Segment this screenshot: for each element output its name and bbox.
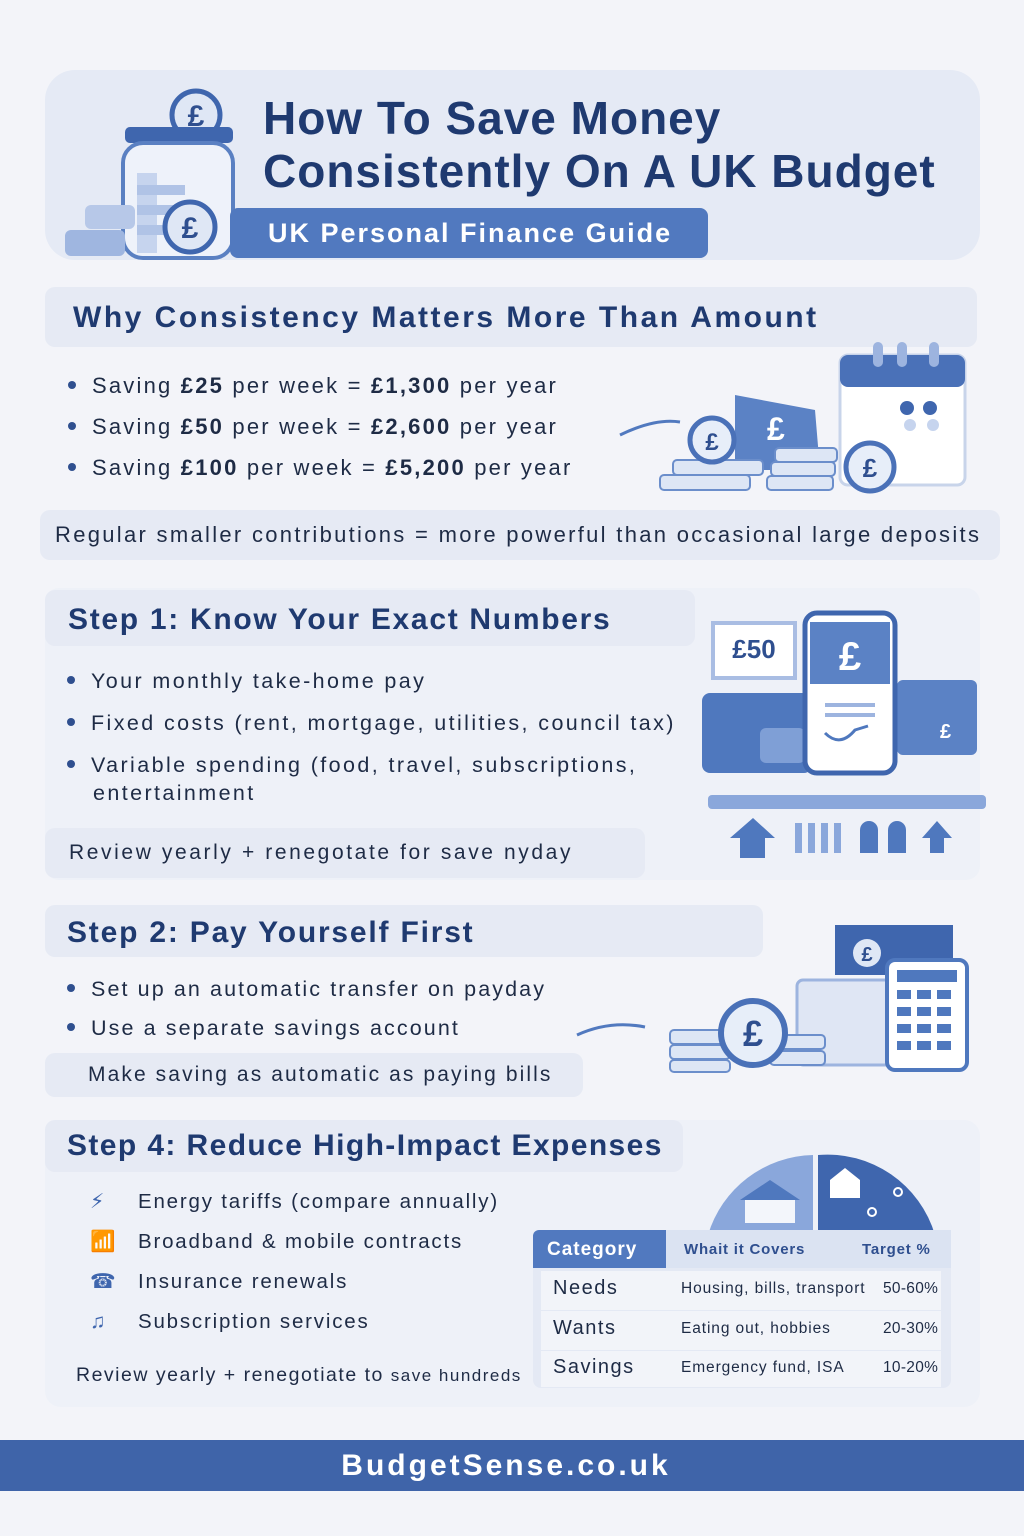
callout [45, 1053, 583, 1097]
bullets: Set up an automatic transfer on payday [91, 977, 546, 1001]
bullets: Saving £100 per week = £5,200 per year [92, 455, 573, 480]
bullets: Variable spending (food, travel, subscriptions, [91, 753, 637, 777]
subtitle banner: UK Personal Finance Guide [268, 218, 672, 248]
footer: BudgetSense.co.uk [341, 1449, 671, 1482]
table: budget split: Housing, bills, transport [681, 1280, 865, 1297]
heading [45, 287, 977, 347]
icon: coins laptop calculator: £ [861, 944, 873, 966]
bullets: Fixed costs (rent, mortgage, utilities, council tax) [91, 711, 676, 735]
heading: Step 2: Pay Yourself First [67, 916, 474, 949]
icon: wallet phone card: £ [839, 635, 861, 679]
icon: half pie chart [710, 1154, 934, 1230]
bullets [67, 669, 676, 805]
bullets: Saving £25 per week = £1,300 per year [92, 373, 558, 398]
bullets [67, 977, 546, 1040]
callout: Review yearly + renegotate for save nyday [69, 841, 573, 864]
icon: wallet phone card: £ [940, 721, 951, 743]
icon: calendar and coins [619, 342, 966, 494]
title: How To Save Money [263, 92, 721, 144]
icon: calendar and coins: £ [863, 453, 878, 483]
expense list: Energy tariffs (compare annually) [138, 1190, 499, 1213]
expense list: Subscription services [138, 1310, 370, 1333]
expense list: Broadband & mobile contracts [138, 1230, 463, 1253]
table: budget split: Target % [862, 1241, 931, 1258]
footer [0, 1440, 1024, 1491]
panel: step 2 [45, 905, 763, 1097]
icon: money jar: £ [188, 100, 205, 133]
icon: money jar [65, 88, 235, 260]
table: budget split: 10-20% [883, 1359, 938, 1376]
panel: step 1 [45, 588, 980, 880]
heading: Why Consistency Matters More Than Amount [73, 301, 819, 334]
expense list: Insurance renewals [138, 1270, 348, 1293]
icon: money jar: £ [182, 212, 199, 245]
title [263, 92, 936, 197]
heading [45, 905, 763, 957]
table: budget split [533, 1230, 951, 1388]
expense list: ⚡ [90, 1190, 106, 1213]
table: budget split: Whait it Covers [684, 1241, 805, 1258]
table: budget split: Emergency fund, ISA [681, 1359, 845, 1376]
title: Consistently On A UK Budget [263, 145, 936, 197]
heading: Step 1: Know Your Exact Numbers [68, 603, 611, 636]
bullets: Saving £50 per week = £2,600 per year [92, 414, 558, 439]
expense list: ♫ [90, 1310, 107, 1333]
bullets: Your monthly take-home pay [91, 669, 426, 693]
icon: calendar and coins: £ [767, 411, 785, 447]
panel: step 4 [45, 1120, 980, 1407]
table: budget split: Eating out, hobbies [681, 1320, 831, 1337]
bullets: Use a separate savings account [91, 1016, 460, 1040]
callout: Make saving as automatic as paying bills [88, 1063, 553, 1086]
callout [45, 828, 645, 878]
table: budget split: Savings [553, 1356, 635, 1378]
icon: coins laptop calculator [576, 925, 969, 1073]
expense list: 📶 [90, 1230, 117, 1253]
icon: coins laptop calculator: £ [743, 1013, 763, 1054]
table: budget split: Category [547, 1239, 637, 1260]
callout: Regular smaller contributions = more powerful than occasional large deposits [55, 522, 981, 547]
callout: Review yearly + renegotiate to save hundreds [76, 1364, 522, 1386]
bullets [68, 373, 573, 480]
icon: wallet phone card: £50 [732, 634, 776, 664]
subtitle banner [230, 208, 708, 258]
table: budget split: Needs [553, 1277, 618, 1299]
table: budget split: Wants [553, 1317, 616, 1339]
expense list [90, 1190, 499, 1333]
table: budget split: 20-30% [883, 1320, 938, 1337]
header panel [45, 70, 980, 260]
bullets: entertainment [93, 781, 256, 805]
icon: calendar and coins: £ [705, 429, 719, 456]
expense list: ☎ [90, 1270, 117, 1293]
table: budget split: 50-60% [883, 1280, 938, 1297]
panel: why consistency [40, 287, 1000, 560]
heading [45, 1120, 683, 1172]
heading: Step 4: Reduce High-Impact Expenses [67, 1129, 663, 1162]
callout [40, 510, 1000, 560]
icon: wallet phone card [702, 610, 986, 858]
heading [45, 590, 695, 646]
